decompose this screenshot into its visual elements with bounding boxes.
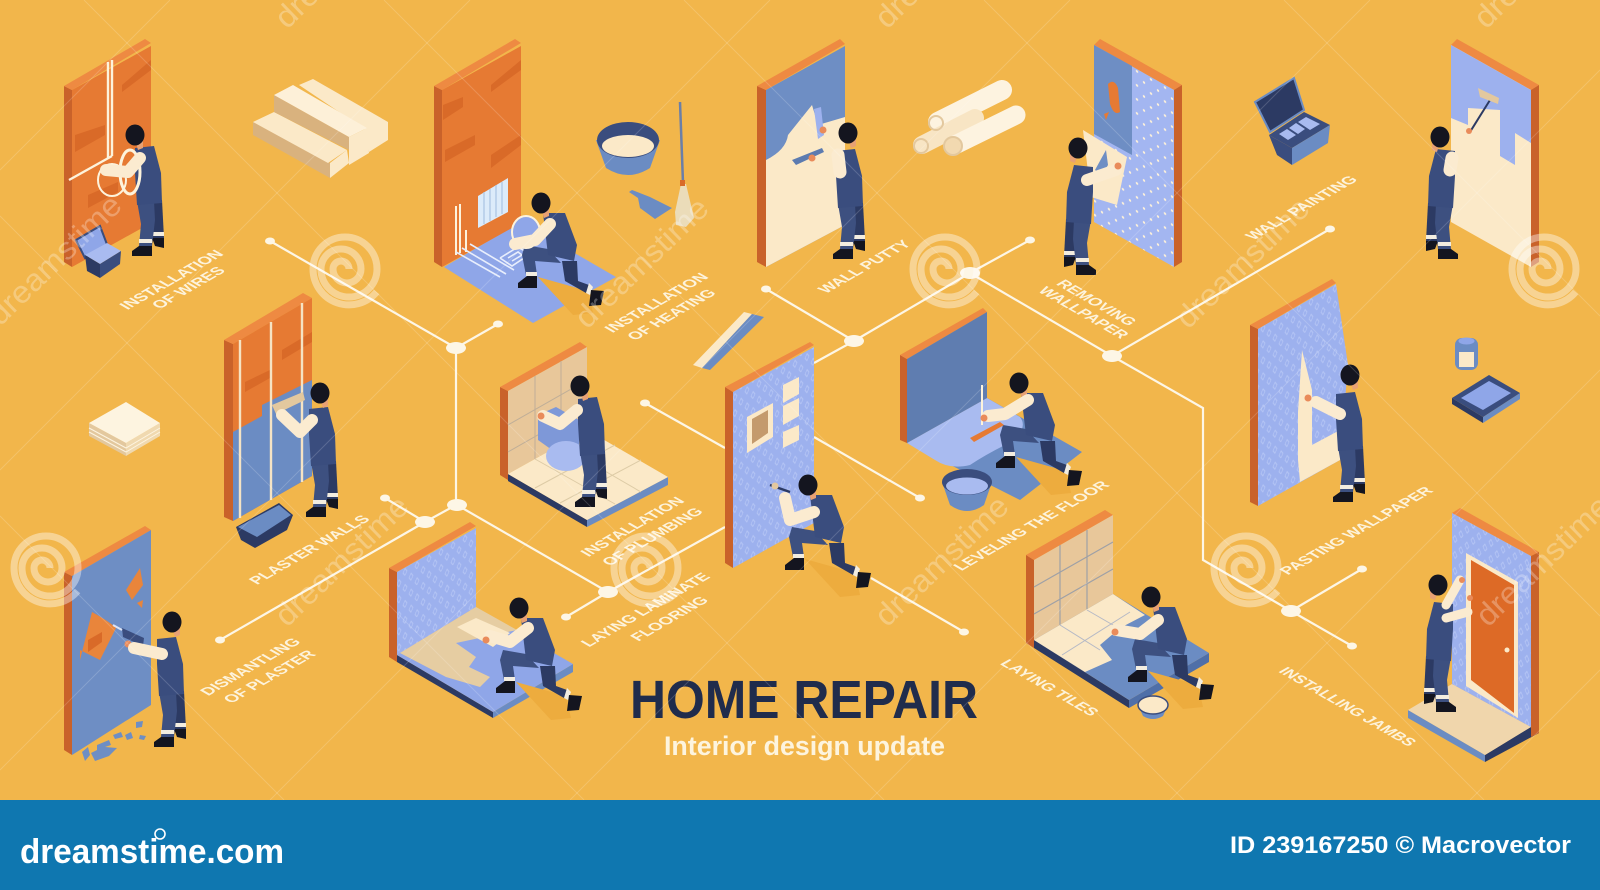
wall (1452, 508, 1539, 737)
label: installation of heating: INSTALLATION (601, 271, 713, 335)
wall (64, 39, 151, 267)
wall (224, 293, 312, 521)
icon: paint can (1455, 338, 1478, 370)
wall (900, 308, 987, 443)
label: laying laminate flooring: FLOORING (627, 594, 713, 644)
icon: bucket (1138, 696, 1168, 719)
label: leveling the floor: LEVELING THE FLOOR (950, 479, 1114, 573)
icon: lumber planks (253, 79, 388, 178)
icon: paint tray (1452, 375, 1520, 423)
label: wall painting: WALL PAINTING (1242, 174, 1362, 242)
icon: wallpaper rolls (914, 90, 1016, 155)
footer logo: dreamstime.com (20, 833, 284, 871)
tiled wall (500, 342, 587, 480)
worker (808, 122, 865, 259)
label: installation of wires: OF WIRES (148, 265, 230, 311)
worker (970, 372, 1082, 495)
icon: plaster basket (236, 503, 293, 548)
label: wall putty: WALL PUTTY (815, 238, 916, 296)
label: installation of plumbing: INSTALLATION (577, 495, 689, 559)
panel: wall painting (1426, 39, 1539, 267)
icon: toilet (538, 407, 586, 471)
label: installation of wires: INSTALLATION (116, 248, 228, 312)
panel: wall putty (757, 39, 865, 267)
icon: paint tray box (1255, 78, 1330, 165)
panel: installation of wires (64, 39, 164, 278)
floor (907, 398, 1082, 500)
subtitle: Interior design update (664, 731, 945, 761)
panel: leveling the floor (900, 308, 1082, 511)
icon: dustpan (629, 190, 672, 219)
wall (1451, 39, 1539, 267)
worker (1304, 364, 1365, 502)
tools (792, 107, 824, 165)
panel: installation of heating (434, 39, 616, 323)
peeled wallpaper (1083, 130, 1127, 205)
worker (770, 474, 871, 597)
tiled wall (1026, 510, 1113, 648)
floor (397, 607, 573, 718)
wall (389, 522, 476, 662)
icon: toolbox (76, 226, 121, 278)
icon: putty spatula (693, 312, 764, 370)
label: dismantling of plaster: DISMANTLING (197, 636, 305, 698)
wall (725, 342, 814, 568)
wall (434, 39, 521, 267)
worker (538, 376, 607, 507)
worker (1426, 126, 1472, 259)
watermark: dreamstime (268, 488, 416, 633)
wall (1094, 39, 1182, 267)
rubble (82, 721, 146, 761)
icon: paint roller (1470, 88, 1499, 132)
panel: removing wallpaper (1064, 39, 1182, 275)
icon: stack of plaster sheets (89, 402, 160, 456)
wall (64, 526, 151, 755)
panel: dismantling of plaster (64, 526, 186, 761)
tiled floor (508, 430, 668, 527)
label: removing wallpaper: REMOVING (1052, 278, 1140, 328)
panel: installation of plumbing (500, 342, 668, 527)
floor (1034, 594, 1209, 708)
wall (1250, 279, 1348, 506)
label: pasting wallpaper: PASTING WALLPAPER (1276, 485, 1438, 577)
label: installation of plumbing: OF PLUMBING (598, 506, 708, 568)
label: removing wallpaper: WALLPAPER (1034, 285, 1132, 341)
panel: laying laminate flooring (389, 522, 582, 720)
panel: central wall repair (725, 342, 871, 597)
worker (272, 382, 338, 517)
label: laying laminate flooring: LAYING LAMINATE (578, 571, 714, 649)
worker (457, 598, 582, 720)
worker (512, 192, 604, 315)
connector network (215, 226, 1367, 650)
panel: laying tiles (1026, 510, 1214, 719)
watermark: dreamstime (868, 488, 1016, 633)
worker (1064, 138, 1122, 275)
worker (1424, 574, 1473, 712)
icon: bucket (596, 122, 660, 175)
worker (113, 612, 186, 747)
panel: installing jambs (1408, 508, 1539, 762)
label: dismantling of plaster: OF PLASTER (220, 648, 320, 706)
watermark: dreamstime (1169, 190, 1317, 335)
floor base (1408, 684, 1539, 762)
icon: broom (675, 102, 694, 227)
footer banner (0, 800, 1600, 890)
icon: door (1466, 553, 1518, 718)
label: installation of heating: OF HEATING (624, 287, 720, 343)
watermark: dreamstime (568, 190, 716, 335)
label: laying tiles: LAYING TILES (996, 657, 1102, 719)
icon: bucket (942, 469, 992, 511)
title: HOME REPAIR (630, 670, 978, 730)
floor rug (444, 222, 616, 323)
panel: pasting wallpaper (1250, 279, 1365, 506)
worker (98, 124, 164, 256)
underfloor pipes (456, 244, 530, 277)
label: installing jambs: INSTALLING JAMBS (1274, 665, 1420, 749)
footer credit: ID 239167250 © Macrovector (1230, 832, 1571, 859)
panel: plaster walls (224, 293, 338, 548)
worker (1112, 586, 1214, 709)
label: plaster walls: PLASTER WALLS (246, 513, 374, 587)
icon: radiator (478, 178, 508, 228)
wall (757, 39, 845, 267)
